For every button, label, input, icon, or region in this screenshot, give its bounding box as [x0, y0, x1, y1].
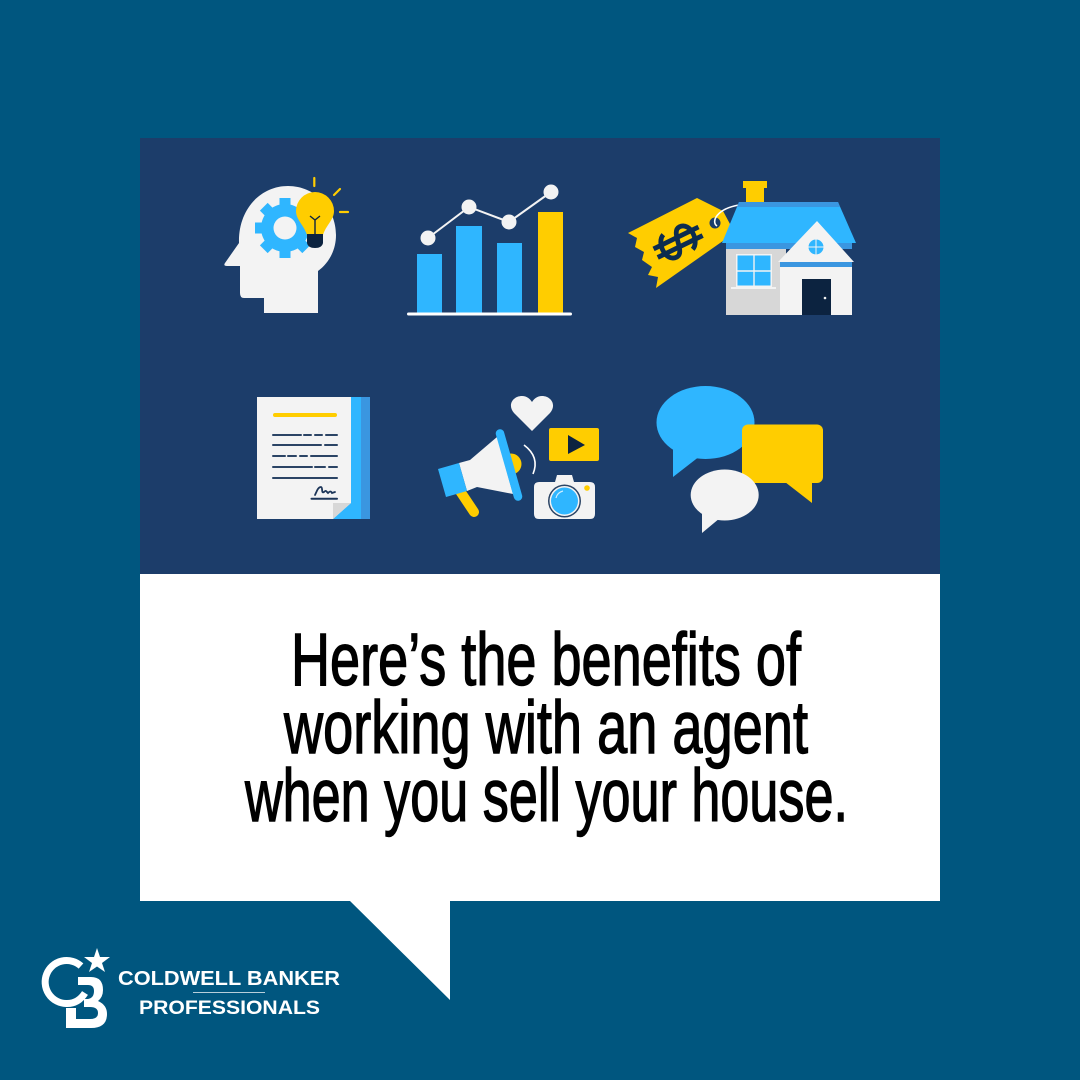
heading — [244, 618, 848, 837]
camera flash — [584, 485, 590, 491]
yellow title line — [273, 413, 337, 417]
paper — [257, 397, 351, 519]
round window — [808, 240, 824, 254]
trend dots — [420, 184, 558, 246]
roof shadow strip — [726, 243, 852, 249]
signature — [312, 487, 337, 499]
logo name: COLDWELL BANKER — [118, 967, 340, 990]
page fold blue — [333, 503, 351, 519]
gear — [255, 198, 315, 258]
side window — [731, 254, 776, 289]
icon: head with gear and light bulb — [224, 178, 348, 313]
icon: signed document — [257, 397, 370, 519]
head silhouette — [224, 186, 336, 313]
play triangle — [568, 435, 585, 454]
logo letter C — [45, 961, 85, 1004]
bulb rays — [314, 178, 348, 212]
logo office: PROFESSIONALS — [139, 997, 320, 1019]
dollar sign — [650, 219, 706, 265]
roof — [722, 202, 856, 243]
price tag — [628, 198, 730, 288]
chart: rising bars with line — [407, 184, 572, 316]
bulb filament — [310, 216, 320, 234]
bulb base — [307, 234, 323, 248]
page fold gray — [333, 503, 351, 519]
trend line — [428, 192, 551, 238]
document back pages — [361, 397, 370, 519]
heading: working with an agent — [283, 686, 808, 769]
text lines — [273, 435, 337, 478]
megaphone rim — [500, 434, 518, 496]
logo letter B — [66, 977, 107, 1028]
sound wave — [524, 445, 535, 474]
baseline — [407, 312, 572, 316]
blue bubble — [656, 386, 754, 477]
icon: speech bubbles — [656, 386, 823, 533]
logo star — [84, 948, 110, 972]
megaphone handle — [460, 491, 474, 512]
roof top strip — [737, 202, 840, 207]
megaphone speaker — [500, 454, 522, 474]
camera lens — [548, 484, 581, 518]
video card — [549, 428, 599, 461]
white bubble — [691, 470, 759, 533]
side wall — [726, 243, 786, 315]
logo: Coldwell Banker Professionals — [45, 948, 340, 1028]
icon: house with price tag — [628, 181, 856, 315]
front wall — [780, 262, 852, 315]
panel: icon grid — [140, 138, 940, 574]
light bulb — [296, 192, 334, 235]
heading: when you sell your house. — [244, 754, 848, 837]
camera body — [534, 475, 595, 519]
door — [802, 279, 831, 315]
logo divider — [193, 992, 265, 993]
front gable — [778, 221, 854, 262]
yellow bubble — [742, 424, 823, 503]
heading: Here’s the benefits of — [291, 618, 801, 701]
yellow bar — [538, 212, 563, 313]
heart — [511, 396, 553, 431]
gable strip — [780, 262, 852, 267]
gear hole — [274, 216, 296, 240]
blue bars — [417, 226, 522, 313]
megaphone cone — [459, 437, 513, 494]
megaphone rear — [438, 463, 467, 497]
blue page — [351, 397, 361, 519]
tag string — [715, 205, 739, 226]
chimney — [743, 181, 767, 203]
tag hole — [710, 218, 720, 228]
icon: megaphone and social media — [438, 396, 599, 519]
panel: speech bubble — [140, 574, 940, 1000]
